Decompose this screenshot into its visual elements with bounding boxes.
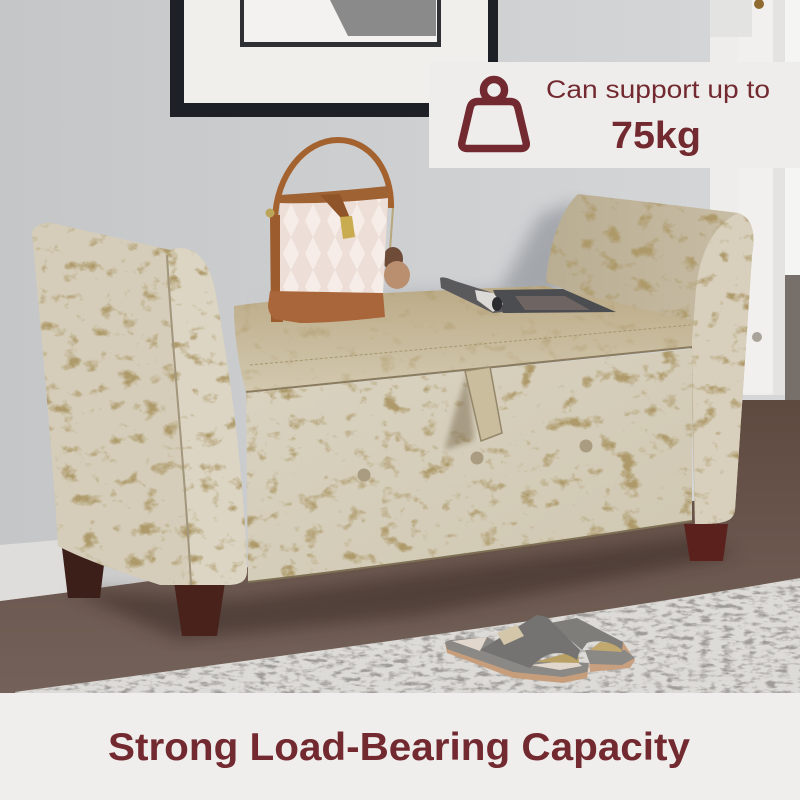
bag clasp — [320, 194, 355, 239]
callout label: Can support up to — [546, 76, 770, 104]
slippers — [445, 615, 635, 683]
bench front panel — [246, 349, 692, 582]
bag left strap — [270, 215, 283, 322]
bag body — [280, 198, 388, 296]
bag base — [268, 291, 385, 323]
wall background — [0, 0, 800, 560]
bag top trim — [280, 186, 388, 203]
bench leg: back right — [684, 524, 728, 561]
icon: weight — [462, 80, 526, 148]
skirting board — [0, 539, 70, 601]
bench leg: front — [174, 582, 225, 636]
front slipper — [445, 615, 589, 683]
bench back shadow on wall — [246, 200, 580, 300]
caption title: Strong Load-Bearing Capacity — [108, 726, 690, 769]
rug — [15, 578, 800, 695]
bag keychain charm — [383, 208, 410, 289]
framed picture — [170, 0, 498, 117]
callout value: 75kg — [611, 115, 701, 157]
bench leg: back left — [62, 548, 106, 598]
bench seat cushion — [234, 286, 692, 392]
bench right arm — [546, 194, 753, 524]
floor shadow under bench — [70, 535, 735, 640]
panel: bottom caption band — [0, 693, 800, 800]
panel: weight capacity callout — [429, 62, 800, 168]
bench pull strap — [465, 367, 502, 441]
handbag — [266, 140, 410, 323]
bench left arm — [32, 223, 247, 585]
bench — [32, 194, 753, 636]
floor — [0, 400, 800, 695]
magazine — [440, 277, 616, 313]
bag handle — [275, 140, 391, 220]
door and frame — [710, 0, 800, 405]
back slipper — [550, 618, 635, 672]
